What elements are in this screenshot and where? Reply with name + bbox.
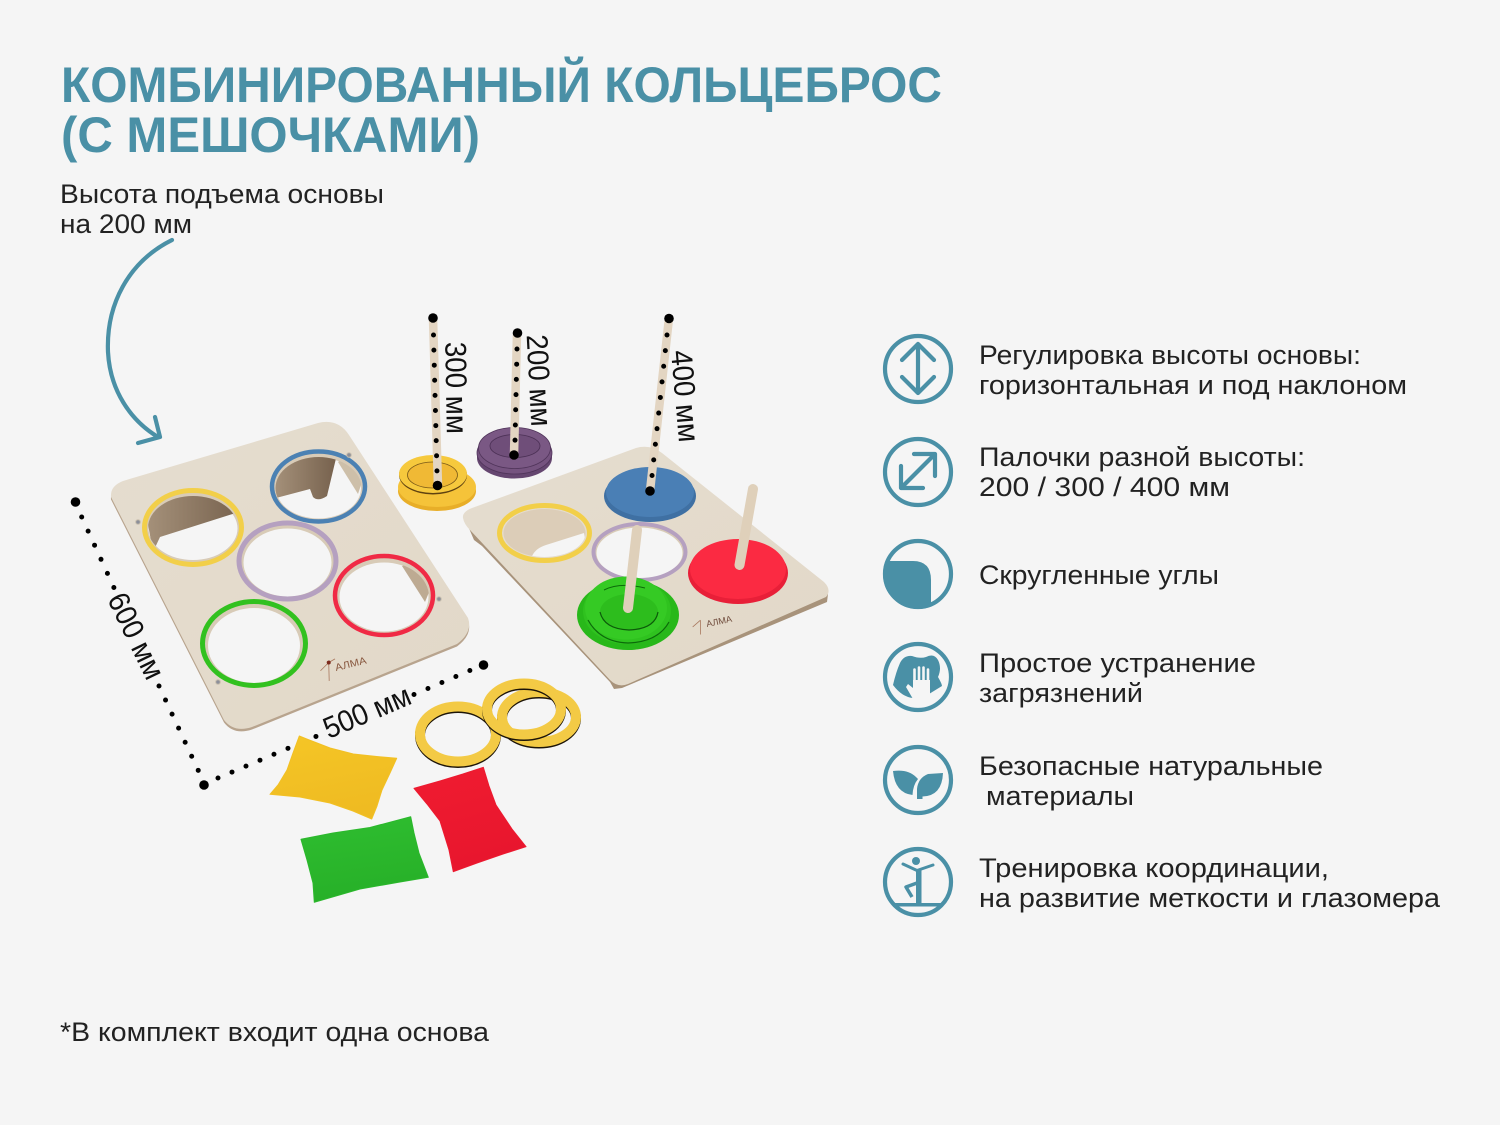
dimension line: 500 mm: 500 мм xyxy=(318,679,416,746)
feature: coordination xyxy=(885,849,1441,915)
feature: natural materials xyxy=(885,747,1323,813)
peg: 400 mm xyxy=(645,314,674,496)
feature: height adjustment: Регулировка высоты основы: xyxy=(979,340,1361,370)
arrow: points to base xyxy=(108,240,172,443)
feature: coordination: на развитие меткости и глазомера xyxy=(979,883,1441,913)
ring: purple inset xyxy=(594,524,686,580)
feature: easy cleaning xyxy=(885,644,1256,710)
peg: 200 mm xyxy=(509,328,522,460)
logo: right board: АЛМА xyxy=(705,614,733,629)
feature: easy cleaning: Простое устранение xyxy=(979,648,1256,678)
icon: diagonal arrows xyxy=(885,439,951,505)
title: КОМБИНИРОВАННЫЙ КОЛЬЦЕБРОС xyxy=(61,56,942,113)
left board: flat base with holes xyxy=(111,422,469,731)
logo: left board: АЛМА xyxy=(334,655,368,674)
dimension label: 400 mm: 400 мм xyxy=(664,349,705,443)
hole: purple ring xyxy=(239,523,336,599)
ring stack: purple xyxy=(477,428,552,478)
feature: natural materials: Безопасные натуральные xyxy=(979,751,1323,781)
loose rings: yellow xyxy=(420,684,576,763)
hole: blue ring xyxy=(270,450,366,522)
dimension line: 600 mm xyxy=(71,497,209,790)
base lift height note: Высота подъема основы xyxy=(60,179,384,209)
base lift height note: на 200 мм xyxy=(60,209,192,239)
logo: right board xyxy=(692,614,734,636)
title: (С МЕШОЧКАМИ) xyxy=(61,107,480,163)
peg: 300 mm xyxy=(428,313,442,490)
hole: yellow ring xyxy=(140,480,245,564)
dimension label: 200 mm: 200 мм xyxy=(520,334,557,427)
bag: yellow xyxy=(270,736,397,819)
feature: rounded corners xyxy=(883,541,1219,609)
feature: peg heights: 200 / 300 / 400 мм xyxy=(979,472,1230,502)
icon: leaves xyxy=(885,747,951,813)
dimension line: 600 mm: 600 мм xyxy=(101,588,171,685)
peg: green disc xyxy=(628,530,637,608)
feature: peg heights: Палочки разной высоты: xyxy=(979,442,1305,472)
footnote: *В комплект входит одна основа xyxy=(60,1017,490,1047)
disc stack: green xyxy=(577,576,679,650)
icon: balancing figure xyxy=(885,849,951,915)
logo: left board xyxy=(319,652,369,682)
feature: natural materials: материалы xyxy=(986,781,1134,811)
bag: green xyxy=(301,817,428,902)
dimension label: 300 mm: 300 мм xyxy=(438,342,473,434)
hole: green ring xyxy=(202,602,306,686)
ring stack: yellow xyxy=(398,455,476,511)
right board with discs and pegs xyxy=(463,447,829,689)
disc: blue xyxy=(604,467,696,522)
peg: red disc xyxy=(740,489,753,565)
dimension line: 500 mm xyxy=(218,660,488,778)
feature: easy cleaning: загрязнений xyxy=(979,678,1143,708)
feature: rounded corners: Скругленные углы xyxy=(979,560,1219,590)
icon: rounded corner xyxy=(883,541,951,609)
disc: red xyxy=(688,539,788,604)
title xyxy=(61,56,942,163)
icon: hand wiping stain xyxy=(885,644,951,710)
base lift height note xyxy=(60,179,384,239)
feature: peg heights xyxy=(885,439,1305,505)
bag: red xyxy=(414,767,526,872)
hole: red ring xyxy=(335,556,434,635)
ring: yellow inset xyxy=(500,506,590,570)
feature: height adjustment: горизонтальная и под наклоном xyxy=(979,370,1407,400)
feature: height adjustment xyxy=(885,336,1407,402)
feature: coordination: Тренировка координации, xyxy=(979,853,1329,883)
icon: up-down arrows xyxy=(885,336,951,402)
screws xyxy=(136,453,441,684)
